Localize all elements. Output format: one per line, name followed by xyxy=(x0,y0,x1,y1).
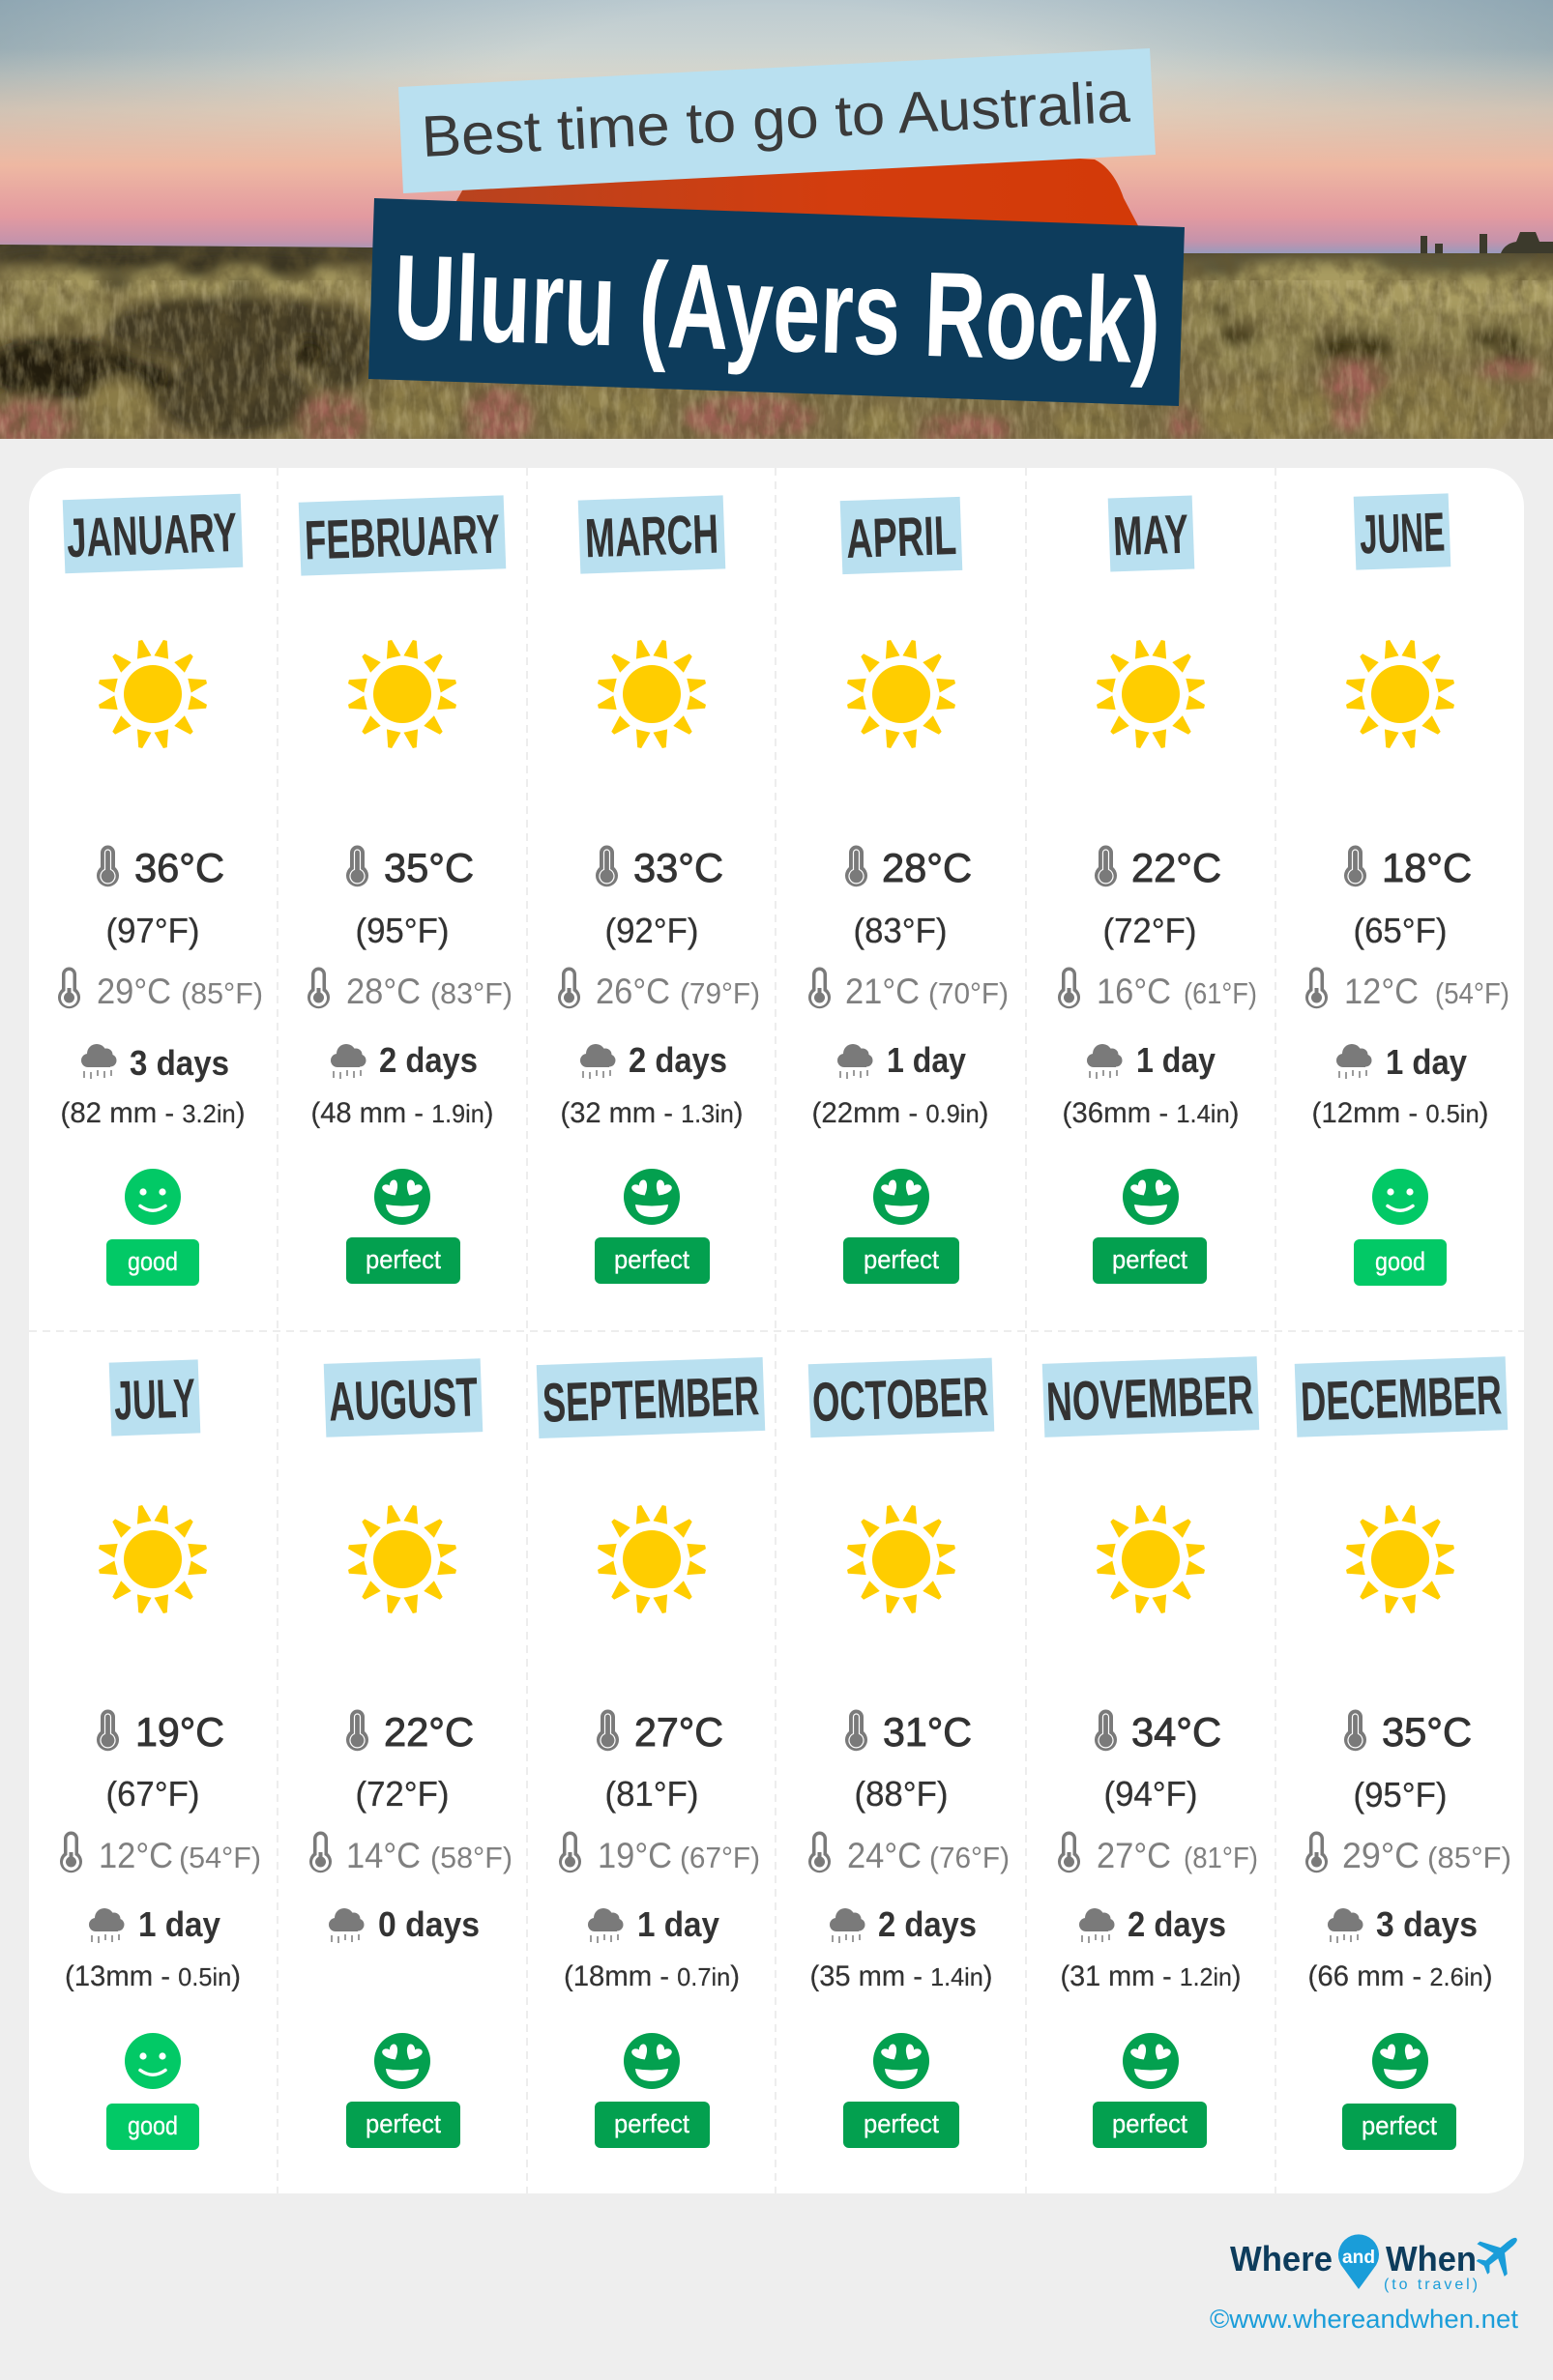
rain days: 1 day xyxy=(887,1040,966,1080)
rain days: 2 days xyxy=(629,1040,727,1080)
rainfall amount: (32 mm - 1.3in) xyxy=(561,1097,744,1129)
low temperature xyxy=(308,967,513,1011)
low temperature: (76°F) xyxy=(929,1841,1010,1874)
high temperature: 28°C xyxy=(882,845,972,890)
high temperature: 35°C xyxy=(384,845,474,890)
rating: perfect: perfect xyxy=(366,1245,441,1274)
month label: February: FEBRUARY xyxy=(304,503,501,572)
low temperature xyxy=(1305,967,1509,1011)
high temperature: 19°C xyxy=(135,1709,224,1755)
low temperature: 26°C xyxy=(596,972,670,1011)
month label: September xyxy=(537,1357,765,1438)
column: June xyxy=(1305,493,1509,1286)
month label: September: SEPTEMBER xyxy=(542,1365,760,1435)
rating: perfect xyxy=(843,1169,959,1284)
rain days: 0 days xyxy=(378,1904,480,1944)
rating: perfect xyxy=(843,2033,959,2148)
icon: sun xyxy=(846,639,956,749)
low temperature: (54°F) xyxy=(1435,976,1509,1010)
title band: Best time to go to Australia: Best time to go to Australia xyxy=(420,70,1131,169)
rating: good: good xyxy=(128,2111,178,2140)
icon: sun xyxy=(597,1504,707,1614)
icon: sun xyxy=(1096,1504,1206,1614)
month label: April xyxy=(840,497,962,574)
low temperature: (85°F) xyxy=(1427,1841,1511,1874)
month label: March: MARCH xyxy=(584,504,719,569)
icon: sun xyxy=(1345,1504,1455,1614)
high temperature in Fahrenheit: (92°F) xyxy=(605,911,698,950)
month label: October xyxy=(808,1358,994,1437)
panel: monthly climate table xyxy=(29,468,1524,2193)
rainfall amount: (82 mm - 3.2in) xyxy=(61,1097,246,1129)
low temperature xyxy=(309,1831,513,1875)
rain days: 1 day xyxy=(138,1904,220,1944)
icon: sun xyxy=(98,639,208,749)
high temperature in Fahrenheit: (83°F) xyxy=(853,911,948,950)
rain days: 3 days xyxy=(1376,1904,1478,1944)
month label: June xyxy=(1354,493,1450,570)
rain days xyxy=(1087,1040,1216,1080)
column: April xyxy=(808,497,1009,1284)
rain days xyxy=(830,1904,977,1944)
high temperature in Fahrenheit: (81°F) xyxy=(605,1774,698,1814)
low temperature: (70°F) xyxy=(928,976,1009,1010)
high temperature in Fahrenheit: (72°F) xyxy=(1102,911,1197,950)
low temperature: 12°C xyxy=(99,1836,173,1875)
rain days xyxy=(89,1904,220,1944)
rain days xyxy=(331,1040,478,1080)
month label: November: NOVEMBER xyxy=(1045,1364,1254,1434)
title band: Best time to go to Australia xyxy=(398,48,1156,193)
month label: July xyxy=(109,1359,200,1437)
high temperature in Fahrenheit: (94°F) xyxy=(1104,1774,1197,1814)
high temperature in Fahrenheit: (65°F) xyxy=(1354,911,1447,950)
high temperature xyxy=(597,1709,723,1755)
rain days: 1 day xyxy=(637,1904,719,1944)
month label: May xyxy=(1108,495,1194,571)
high temperature in Fahrenheit: (72°F) xyxy=(356,1774,449,1814)
rainfall amount: (36mm - 1.4in) xyxy=(1063,1097,1240,1129)
column: September xyxy=(537,1357,765,2148)
banner photo: Uluru at sunset xyxy=(0,0,1553,448)
rainfall amount: (12mm - 0.5in) xyxy=(1312,1097,1489,1129)
logo: Where and When to travel xyxy=(1230,2222,1531,2293)
rating: perfect xyxy=(595,2033,710,2148)
low temperature xyxy=(808,1831,1010,1875)
icon: sun xyxy=(98,1504,208,1614)
rating: perfect: perfect xyxy=(1112,2109,1187,2138)
icon: sun xyxy=(347,1504,457,1614)
rainfall amount: (35 mm - 1.4in) xyxy=(810,1960,993,1992)
high temperature: 27°C xyxy=(634,1709,723,1755)
rating: good: good xyxy=(128,1247,178,1276)
high temperature in Fahrenheit: (97°F) xyxy=(106,911,199,950)
icon: sun xyxy=(347,639,457,749)
low temperature: 29°C xyxy=(97,972,171,1011)
low temperature: 12°C xyxy=(1344,972,1419,1011)
month label: May: MAY xyxy=(1112,504,1189,567)
rating: good xyxy=(1354,1169,1447,1286)
rating: perfect xyxy=(1093,1169,1207,1284)
low temperature xyxy=(1305,1831,1511,1875)
logo tagline: (to travel) xyxy=(1384,2277,1478,2293)
title band: Uluru (Ayers Rock): Uluru (Ayers Rock) xyxy=(392,230,1162,390)
rain days xyxy=(588,1904,719,1944)
rainfall amount: (13mm - 0.5in) xyxy=(65,1960,241,1992)
rating: perfect: perfect xyxy=(614,2109,689,2138)
low temperature: 19°C xyxy=(598,1836,672,1875)
month label: November xyxy=(1042,1356,1259,1437)
month label: August: AUGUST xyxy=(328,1366,479,1434)
low temperature: 28°C xyxy=(346,972,421,1011)
low temperature: (83°F) xyxy=(430,976,513,1010)
low temperature: (79°F) xyxy=(680,976,760,1010)
high temperature: 22°C xyxy=(384,1709,474,1755)
high temperature: 31°C xyxy=(883,1709,972,1755)
high temperature in Fahrenheit: (95°F) xyxy=(356,911,449,950)
icon: sun xyxy=(846,1504,956,1614)
rain days xyxy=(1336,1042,1467,1082)
column: February xyxy=(299,495,513,1284)
high temperature in Fahrenheit: (67°F) xyxy=(106,1774,199,1814)
rain days xyxy=(1079,1904,1226,1944)
column: October xyxy=(808,1358,1010,2148)
rainfall amount: (31 mm - 1.2in) xyxy=(1060,1960,1242,1992)
month label: March xyxy=(578,495,725,574)
high temperature: 22°C xyxy=(1131,845,1221,890)
rain days xyxy=(329,1904,480,1944)
high temperature: 35°C xyxy=(1382,1709,1472,1755)
logo wordmark: When: When xyxy=(1386,2239,1477,2278)
month label: February xyxy=(299,495,506,576)
rating: perfect xyxy=(1093,2033,1207,2148)
month label: January xyxy=(63,494,243,573)
column: August xyxy=(309,1358,513,2148)
icon: sun xyxy=(1345,639,1455,749)
high temperature: 33°C xyxy=(633,845,723,890)
rain days xyxy=(580,1040,727,1080)
rain days: 2 days xyxy=(1128,1904,1226,1944)
low temperature xyxy=(808,967,1009,1011)
high temperature in Fahrenheit: (88°F) xyxy=(855,1774,948,1814)
month label: October: OCTOBER xyxy=(811,1366,989,1434)
month label: January: JANUARY xyxy=(66,502,238,569)
low temperature: 16°C xyxy=(1097,972,1171,1011)
icon: sun xyxy=(597,639,707,749)
low temperature xyxy=(559,1831,760,1875)
high temperature: 36°C xyxy=(134,845,224,890)
low temperature: 24°C xyxy=(847,1836,922,1875)
rain days: 1 day xyxy=(1386,1042,1467,1082)
rating: perfect: perfect xyxy=(1362,2111,1437,2140)
rating: perfect xyxy=(1342,2033,1456,2150)
rating: perfect: perfect xyxy=(864,1245,939,1274)
rating: good: good xyxy=(1375,1247,1425,1276)
rainfall amount: (48 mm - 1.9in) xyxy=(311,1097,494,1129)
rain days xyxy=(1328,1904,1478,1944)
high temperature xyxy=(97,1709,224,1755)
high temperature in Fahrenheit: (95°F) xyxy=(1354,1775,1447,1814)
column: January xyxy=(58,494,263,1286)
low temperature xyxy=(1058,1831,1258,1875)
rain days: 3 days xyxy=(130,1043,229,1083)
rainfall amount: (18mm - 0.7in) xyxy=(564,1960,740,1992)
rain days: 2 days xyxy=(878,1904,977,1944)
month label: April: APRIL xyxy=(845,505,957,570)
low temperature: (54°F) xyxy=(179,1841,261,1874)
rating: perfect: perfect xyxy=(366,2109,441,2138)
low temperature xyxy=(58,967,263,1011)
title band: Uluru (Ayers Rock) xyxy=(368,198,1185,406)
month label: August xyxy=(324,1358,483,1437)
high temperature xyxy=(845,1709,972,1755)
rating: perfect xyxy=(346,2033,460,2148)
high temperature: 18°C xyxy=(1382,845,1472,890)
rating: perfect: perfect xyxy=(614,1245,689,1274)
high temperature: 34°C xyxy=(1131,1709,1221,1755)
rating: perfect: perfect xyxy=(1112,1245,1187,1274)
low temperature xyxy=(60,1831,261,1875)
column: July xyxy=(60,1359,261,2150)
column: November xyxy=(1042,1356,1259,2148)
logo icon: map pin xyxy=(1338,2234,1379,2289)
rain days xyxy=(837,1040,966,1080)
rain days: 2 days xyxy=(379,1040,478,1080)
month label: July: JULY xyxy=(113,1368,196,1432)
low temperature: (85°F) xyxy=(181,976,263,1010)
low temperature: (67°F) xyxy=(680,1841,760,1874)
low temperature: 27°C xyxy=(1097,1836,1171,1875)
rating: good xyxy=(106,2033,199,2150)
column: December xyxy=(1295,1356,1511,2150)
icon: sun xyxy=(1096,639,1206,749)
low temperature xyxy=(558,967,760,1011)
low temperature: 21°C xyxy=(845,972,920,1011)
low temperature: (58°F) xyxy=(430,1841,513,1874)
rain days: 1 day xyxy=(1136,1040,1216,1080)
rating: perfect xyxy=(346,1169,460,1284)
website credit: ©www.whereandwhen.net xyxy=(1210,2305,1519,2334)
rain days xyxy=(81,1043,229,1083)
month label: June: JUNE xyxy=(1359,501,1446,566)
column: March xyxy=(558,495,760,1284)
rainfall amount: (66 mm - 2.6in) xyxy=(1308,1960,1493,1992)
low temperature: (61°F) xyxy=(1184,976,1257,1010)
column: May xyxy=(1058,495,1257,1284)
logo wordmark: Where: Where xyxy=(1230,2239,1333,2278)
icon: airplane xyxy=(1468,2222,1531,2284)
low temperature xyxy=(1058,967,1257,1011)
low temperature: (81°F) xyxy=(1184,1841,1258,1874)
logo icon: map pin: and xyxy=(1342,2248,1375,2268)
rating: perfect xyxy=(595,1169,710,1284)
low temperature: 29°C xyxy=(1342,1836,1420,1875)
rating: good xyxy=(106,1169,199,1286)
rating: perfect: perfect xyxy=(864,2109,939,2138)
rainfall amount: (22mm - 0.9in) xyxy=(812,1097,989,1129)
low temperature: 14°C xyxy=(346,1836,421,1875)
